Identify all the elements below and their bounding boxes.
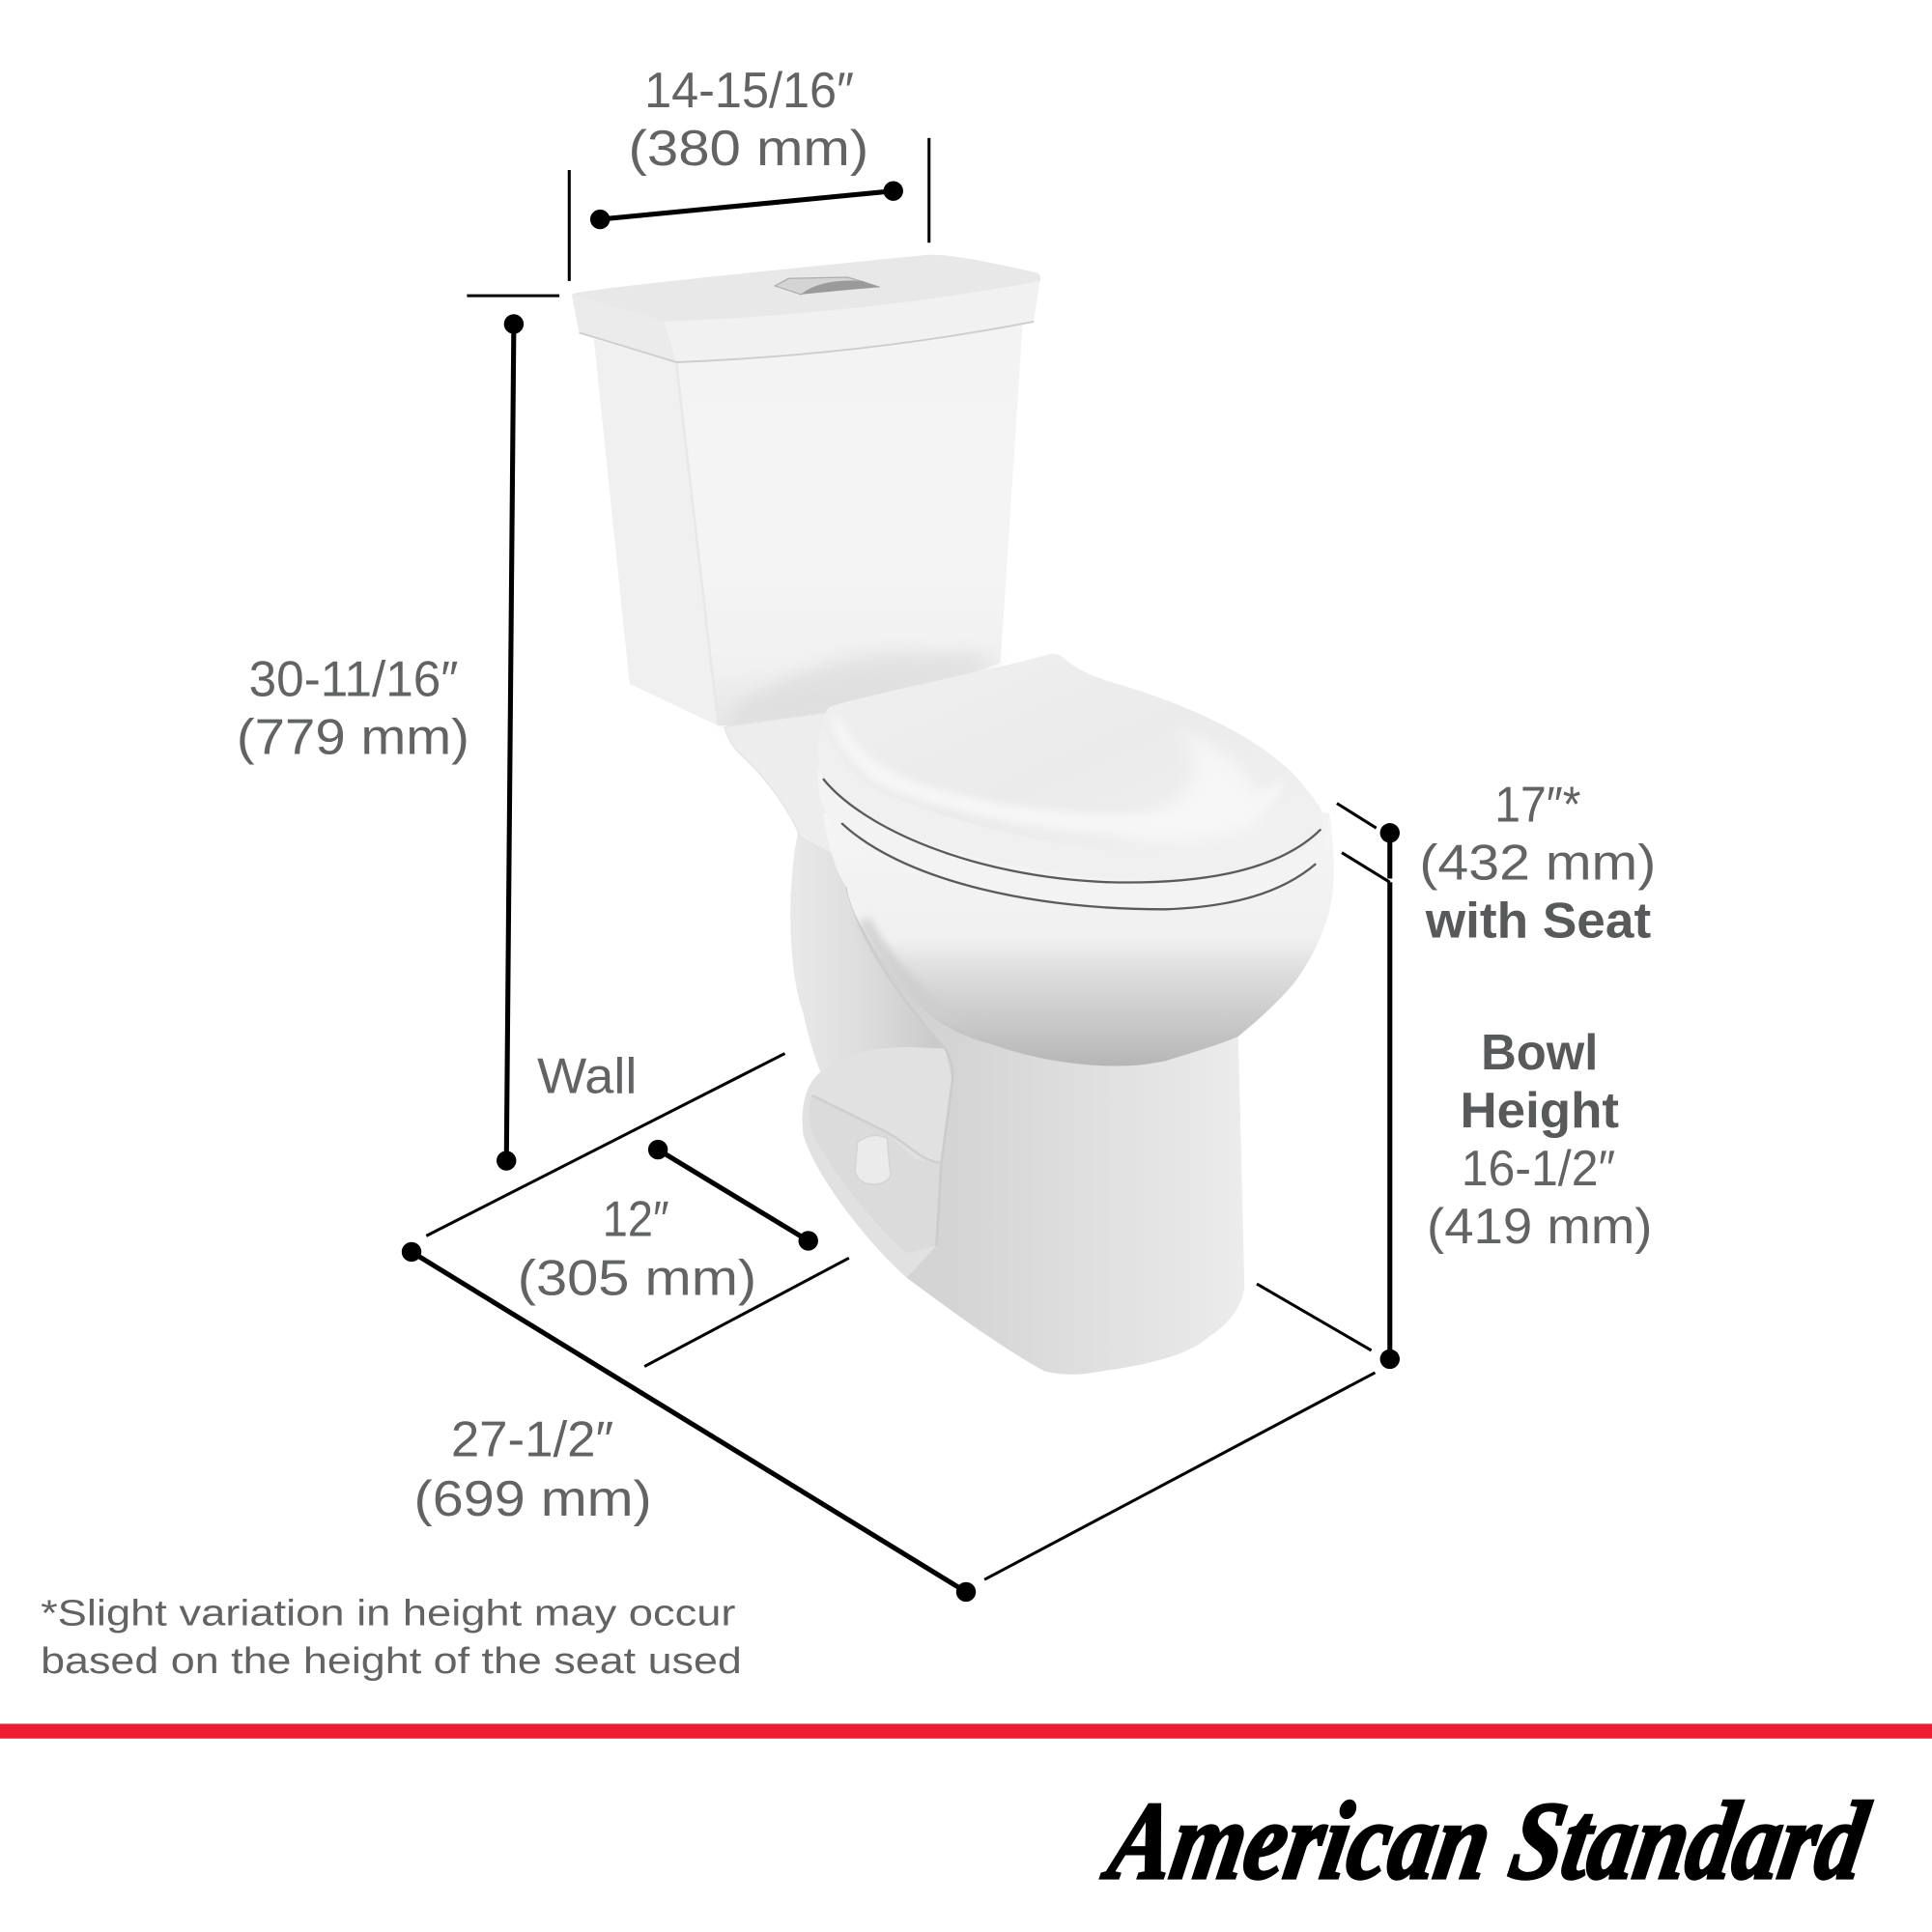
dimension: seat height: with Seat [1425,894,1651,950]
dimension: overall height: (779 mm) [237,710,469,766]
dimension: tank width: 14-15/16″ [644,63,854,119]
toilet illustration [572,255,1334,1375]
dimension: seat height [1257,778,1656,1369]
dimension: tank width [569,63,929,281]
dimension: overall depth [402,1242,1375,1602]
dimension: bowl height: Bowl [1481,1025,1598,1081]
dimension: bowl height [1427,1025,1652,1255]
dimension: rough-in [426,1054,849,1367]
toilet bowl [823,813,1334,1065]
toilet seat lid [817,654,1322,883]
dimension: bowl height: 16-1/2″ [1462,1141,1615,1197]
flush button [775,277,880,295]
footnote: *Slight variation in height may occur [41,1592,736,1634]
dimension: overall depth: 27-1/2″ [451,1412,613,1468]
dimension: overall height [237,296,559,1171]
dimension: overall height: 30-11/16″ [249,652,458,708]
dimension: rough-in: 12″ [603,1191,669,1247]
toilet tank body [594,323,1023,729]
toilet tank lid [572,255,1040,362]
dimension: overall depth: (699 mm) [414,1471,652,1527]
water inlet neck [724,712,850,863]
dimension: tank width: (380 mm) [629,121,868,177]
toilet pedestal and foot [790,813,1244,1375]
dimension: rough-in: (305 mm) [518,1251,756,1307]
toilet seat ring [818,739,1329,909]
dimension: bowl height: Height [1460,1083,1619,1139]
wall label: Wall [537,1048,637,1104]
footnote [41,1592,742,1682]
footnote: based on the height of the seat used [41,1640,742,1682]
dimension: seat height: 17″* [1494,778,1580,834]
dimension: seat height: (432 mm) [1419,836,1656,892]
dimension: bowl height: (419 mm) [1427,1199,1652,1255]
red divider bar [0,1723,1932,1739]
